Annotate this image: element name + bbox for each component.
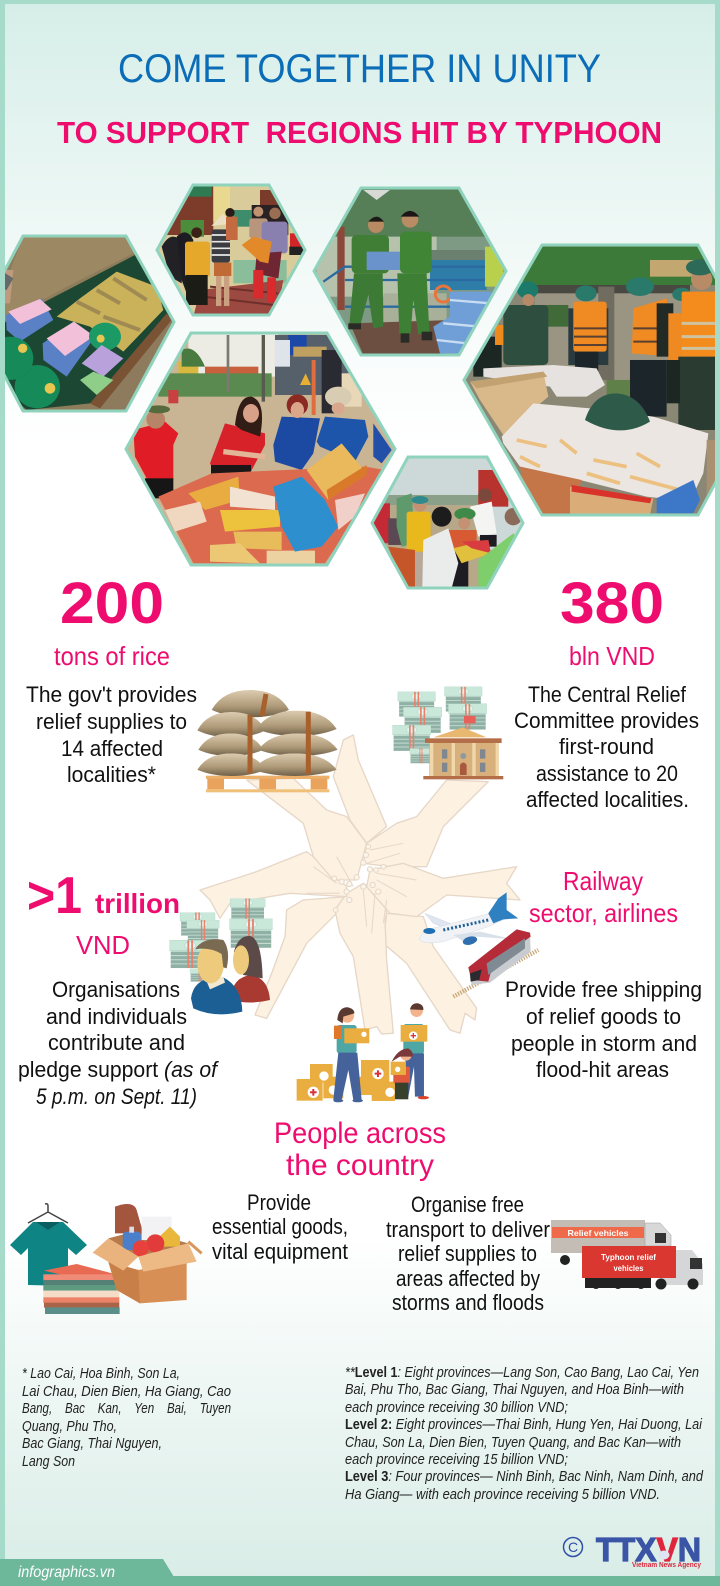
text: free transport: transport to deliver [386, 1217, 550, 1242]
stat: over 1 trillion VND: >1 [27, 867, 82, 925]
photo: police officers with water [316, 190, 504, 354]
icon: relief trucks: Relief vehicles [568, 1228, 629, 1238]
stat: railway and airlines: sector, airlines [529, 898, 678, 928]
text: organisations and individuals: pledge support (as of [18, 1057, 220, 1082]
footnote: funding levels: Chau, Son La, Dien Bien, Tuyen Quang, and Bac Kan—with [345, 1435, 681, 1451]
photo frames [0, 185, 720, 588]
stat: railway and airlines [505, 866, 702, 1082]
footnote: rice localities [22, 1366, 231, 1470]
text: free transport: relief supplies to [398, 1241, 537, 1266]
text: free transport: Organise free [411, 1192, 524, 1217]
footnote: rice localities: * Lao Cai, Hoa Binh, Son La, [22, 1366, 180, 1382]
icon: box of essential goods [93, 1204, 202, 1303]
footnote: funding levels: Ha Giang— with each province receiving 5 billion VND. [345, 1487, 660, 1503]
text: essential goods: vital equipment [212, 1239, 349, 1264]
footer text: website: infographics.vn [18, 1564, 115, 1581]
photo: soldiers with rice bags [460, 240, 720, 520]
footnote: funding levels: each province receiving 15 billion VND; [345, 1452, 568, 1468]
heading: people across the country: People across [274, 1117, 446, 1150]
footnote: rice localities: Bac Giang, Thai Nguyen, [22, 1436, 162, 1452]
footer band [0, 1559, 720, 1586]
icon: rice sacks on pallet [197, 690, 338, 792]
photo: relief goods on boat [0, 235, 177, 412]
text: government relief: 14 affected [61, 736, 163, 761]
stat: over 1 trillion VND: VND [76, 930, 130, 960]
photo: people receiving goods at steps [158, 186, 304, 314]
footnote: rice localities: Quang, Phu Tho, [22, 1419, 117, 1435]
icon: donors with money [169, 898, 273, 1014]
stat: over 1 trillion VND: trillion [95, 888, 180, 919]
text: organisations and individuals: contribute and [48, 1030, 185, 1055]
text: free shipping: people in storm and [511, 1031, 697, 1056]
title: COME TOGETHER IN UNITY [118, 47, 601, 91]
stat: railway and airlines: Railway [563, 866, 643, 896]
stat: 200 tons of rice: 200 [60, 571, 164, 636]
text: central relief committee: affected localities. [526, 787, 689, 812]
text: free transport: areas affected by [396, 1266, 541, 1291]
text: government relief [26, 682, 197, 787]
logo: TTXVN Vietnam News Agency: TTXVN [596, 1531, 701, 1568]
text: organisations and individuals: and individuals [46, 1004, 187, 1029]
icon: relief trucks [551, 1220, 703, 1290]
photo: Red Cross volunteers with goods [125, 333, 398, 567]
footnote: funding levels [345, 1365, 704, 1503]
logo: TTXVN Vietnam News Agency: Vietnam News Agency [632, 1562, 701, 1569]
text: free shipping: of relief goods to [526, 1004, 681, 1029]
heading: people across the country: the country [286, 1149, 434, 1182]
text: central relief committee: first-round [559, 734, 654, 759]
photo: handing out relief packages [374, 458, 522, 586]
text: government relief: The gov't provides [26, 682, 197, 707]
text: government relief: localities* [67, 762, 156, 787]
footnote: funding levels: Bai, Phu Tho, Bac Giang, Thai Nguyen, and Hoa Binh—with [345, 1382, 684, 1398]
footnote: rice localities: Lang Son [22, 1454, 75, 1470]
icon: folded clothes stack [43, 1264, 120, 1314]
subtitle: TO SUPPORT REGIONS HIT BY TYPHOON [57, 115, 662, 150]
icon: relief trucks: vehicles [614, 1263, 644, 1273]
text: central relief committee: The Central Relief [528, 682, 687, 707]
stat: 380 bln VND: bln VND [569, 641, 655, 671]
heading: people across the country [274, 1117, 446, 1182]
logo: TTXVN Vietnam News Agency: C [568, 1539, 578, 1555]
text: organisations and individuals [18, 977, 220, 1109]
text: central relief committee [514, 682, 699, 812]
text: free transport [386, 1192, 550, 1315]
text: essential goods: Provide [247, 1190, 311, 1215]
footnote: rice localities: Lai Chau, Dien Bien, Ha Giang, Cao [22, 1384, 231, 1400]
text: free shipping: flood-hit areas [536, 1057, 669, 1082]
text: central relief committee: Committee provides [514, 708, 699, 733]
joined hands illustration [200, 735, 520, 1034]
text: essential goods [212, 1190, 349, 1264]
icon: money stacks and bank [392, 687, 503, 779]
text: free transport: storms and floods [392, 1290, 544, 1315]
stat: 200 tons of rice: tons of rice [54, 641, 170, 671]
footnote: funding levels: each province receiving 30 billion VND; [345, 1400, 568, 1416]
icon: airplane [419, 892, 518, 946]
footnote: rice localities: Bang, Bac Kan, Yen Bai, Tuyen [22, 1401, 231, 1417]
text: government relief: relief supplies to [36, 709, 187, 734]
text: central relief committee: assistance to 20 [536, 761, 678, 786]
text: essential goods: essential goods, [212, 1214, 348, 1239]
stat: 380 bln VND: 380 [560, 571, 664, 636]
text: free shipping [505, 977, 702, 1082]
text: organisations and individuals: Organisations [52, 977, 180, 1002]
stat: 380 bln VND [514, 571, 699, 812]
text: free shipping: Provide free shipping [505, 977, 702, 1002]
stat: over 1 trillion VND [18, 867, 220, 1109]
icon: family carrying relief boxes [297, 1003, 429, 1102]
icon: train [453, 929, 538, 997]
icon: relief trucks: Typhoon relief [601, 1252, 656, 1262]
stat: 200 tons of rice [26, 571, 197, 787]
icon: hanging shirt [10, 1204, 87, 1286]
text: organisations and individuals: 5 p.m. on Sept. 11) [36, 1084, 197, 1109]
